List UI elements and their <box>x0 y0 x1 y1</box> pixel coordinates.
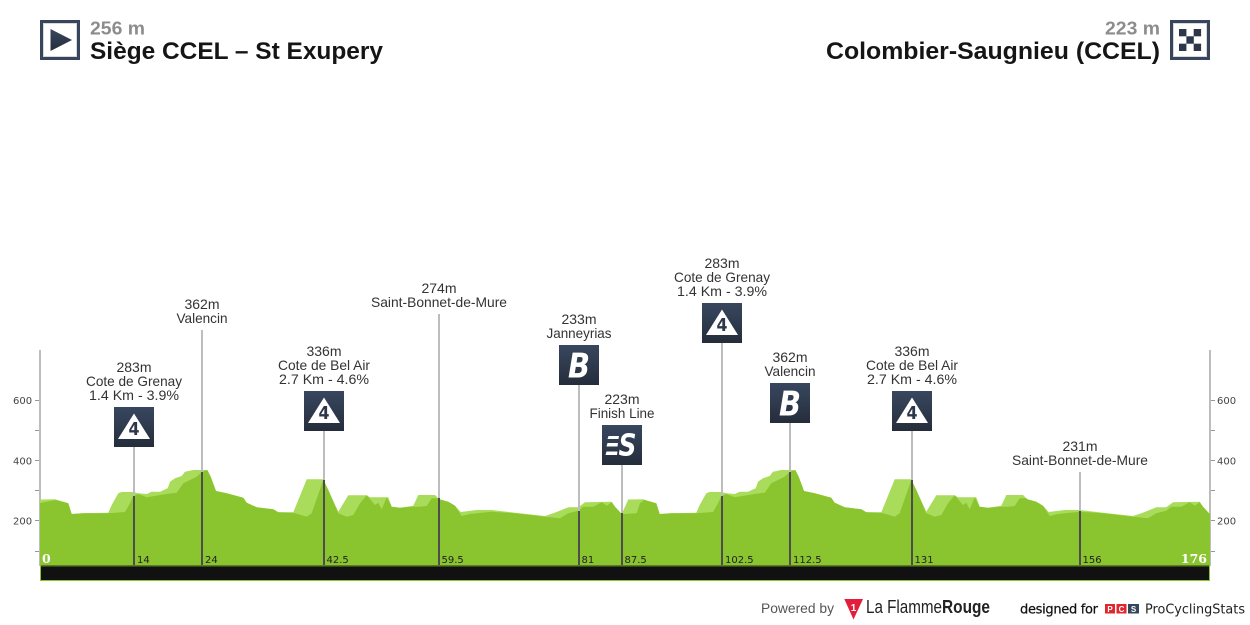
elevation chart <box>13 255 1236 581</box>
marker: km 102.5 Cote de Grenay: 4 <box>716 316 728 336</box>
marker: km 102.5 Cote de Grenay: Cote de Grenay <box>674 269 770 285</box>
marker: km 14 Cote de Grenay: 14 <box>137 555 150 566</box>
marker: km 42.5 Cote de Bel Air: 336m <box>306 343 342 359</box>
marker: km 131 Cote de Bel Air: 4 <box>906 404 918 424</box>
marker: km 112.5 Valencin: Valencin <box>764 363 816 379</box>
marker: km 156 Saint-Bonnet-de-Mure <box>1012 438 1148 566</box>
marker: km 42.5 Cote de Bel Air: 4 <box>318 404 330 424</box>
marker: km 24 Valencin: 24 <box>205 555 218 566</box>
footer credits <box>761 597 1245 620</box>
road bar <box>40 565 1210 581</box>
icon: start play button <box>42 22 78 58</box>
logo: PCS ProCyclingStats: ProCyclingStats <box>1145 602 1245 618</box>
y axis left: 400 <box>13 456 32 468</box>
marker: km 42.5 Cote de Bel Air: 42.5 <box>326 555 349 566</box>
marker: km 81 Janneyrias: 81 <box>582 555 594 566</box>
marker: km 131 Cote de Bel Air: 2.7 Km - 4.6% <box>867 371 957 387</box>
start header <box>42 18 384 65</box>
marker: km 14 Cote de Grenay <box>86 359 182 566</box>
marker: km 81 Janneyrias: 233m <box>561 311 597 327</box>
marker: km 87.5 Finish Line: S <box>618 428 636 464</box>
marker: km 59.5 Saint-Bonnet-de-Mure: Saint-Bonnet-de-Mure <box>371 294 507 310</box>
marker: km 24 Valencin <box>176 296 228 566</box>
y axis right: 400 <box>1217 456 1236 468</box>
marker: km 81 Janneyrias: Janneyrias <box>546 325 612 341</box>
marker: km 59.5 Saint-Bonnet-de-Mure <box>371 280 507 566</box>
finish header <box>826 18 1208 65</box>
marker: km 42.5 Cote de Bel Air <box>278 343 370 566</box>
start name: Siège CCEL – St Exupery <box>90 38 384 65</box>
marker: km 42.5 Cote de Bel Air: 2.7 Km - 4.6% <box>279 371 369 387</box>
powered by: Powered by <box>761 600 834 616</box>
marker: km 131 Cote de Bel Air: 336m <box>894 343 930 359</box>
logo: PCS ProCyclingStats: S <box>1131 605 1137 614</box>
logo: La Flamme Rouge: La Flamme <box>866 597 942 617</box>
finish distance: 176 <box>1181 551 1207 566</box>
marker: km 156 Saint-Bonnet-de-Mure: Saint-Bonnet-de-Mure <box>1012 452 1148 468</box>
marker: km 42.5 Cote de Bel Air: Cote de Bel Air <box>278 357 370 373</box>
marker: km 24 Valencin: Valencin <box>176 310 228 326</box>
finish name: Colombier-Saugnieu (CCEL) <box>826 38 1160 65</box>
marker: km 102.5 Cote de Grenay: 1.4 Km - 3.9% <box>677 283 767 299</box>
logo: PCS ProCyclingStats: C <box>1119 605 1125 614</box>
logo: La Flamme Rouge: 1 <box>851 603 857 614</box>
marker: km 102.5 Cote de Grenay <box>674 255 770 566</box>
finish altitude: 223 m <box>1105 18 1160 38</box>
start distance: 0 <box>42 551 51 566</box>
y axis left <box>13 350 41 566</box>
marker: km 131 Cote de Bel Air <box>866 343 958 566</box>
elevation profile <box>40 470 1210 565</box>
y axis right: 200 <box>1217 516 1236 528</box>
marker: km 59.5 Saint-Bonnet-de-Mure: 59.5 <box>442 555 464 566</box>
y axis left: 600 <box>13 396 32 407</box>
marker: km 87.5 Finish Line <box>590 391 655 566</box>
designed for: designed for <box>1020 602 1099 618</box>
marker: km 112.5 Valencin: 112.5 <box>793 555 822 566</box>
logo: La Flamme Rouge: Rouge <box>942 597 990 617</box>
marker: km 87.5 Finish Line: 223m <box>604 391 640 407</box>
marker: km 102.5 Cote de Grenay: 102.5 <box>725 555 754 566</box>
marker: km 14 Cote de Grenay: 1.4 Km - 3.9% <box>89 387 179 403</box>
marker: km 131 Cote de Bel Air: Cote de Bel Air <box>866 357 958 373</box>
marker: km 14 Cote de Grenay: Cote de Grenay <box>86 373 182 389</box>
icon: finish checkered flag <box>1172 22 1208 58</box>
marker: km 112.5 Valencin <box>764 349 822 566</box>
marker: km 87.5 Finish Line: 87.5 <box>624 555 647 566</box>
marker: km 112.5 Valencin: 362m <box>772 349 808 365</box>
marker: km 59.5 Saint-Bonnet-de-Mure: 274m <box>421 280 457 296</box>
y axis right <box>1209 350 1236 566</box>
marker: km 24 Valencin: 362m <box>184 296 220 312</box>
y axis right: 600 <box>1217 396 1236 407</box>
marker: km 87.5 Finish Line: Finish Line <box>590 405 655 421</box>
logo: PCS ProCyclingStats: P <box>1107 605 1113 614</box>
logo: La Flamme Rouge <box>844 597 990 620</box>
marker: km 156 Saint-Bonnet-de-Mure: 231m <box>1062 438 1098 454</box>
start altitude: 256 m <box>90 18 145 38</box>
y axis left: 200 <box>13 516 32 528</box>
marker: km 102.5 Cote de Grenay: 283m <box>704 255 740 271</box>
marker: km 14 Cote de Grenay: 283m <box>116 359 152 375</box>
marker: km 112.5 Valencin: B <box>779 384 801 424</box>
marker: km 14 Cote de Grenay: 4 <box>128 420 140 440</box>
marker: km 156 Saint-Bonnet-de-Mure: 156 <box>1082 555 1102 566</box>
marker: km 131 Cote de Bel Air: 131 <box>914 555 934 566</box>
marker: km 81 Janneyrias: B <box>568 346 590 386</box>
marker: km 81 Janneyrias <box>546 311 612 566</box>
